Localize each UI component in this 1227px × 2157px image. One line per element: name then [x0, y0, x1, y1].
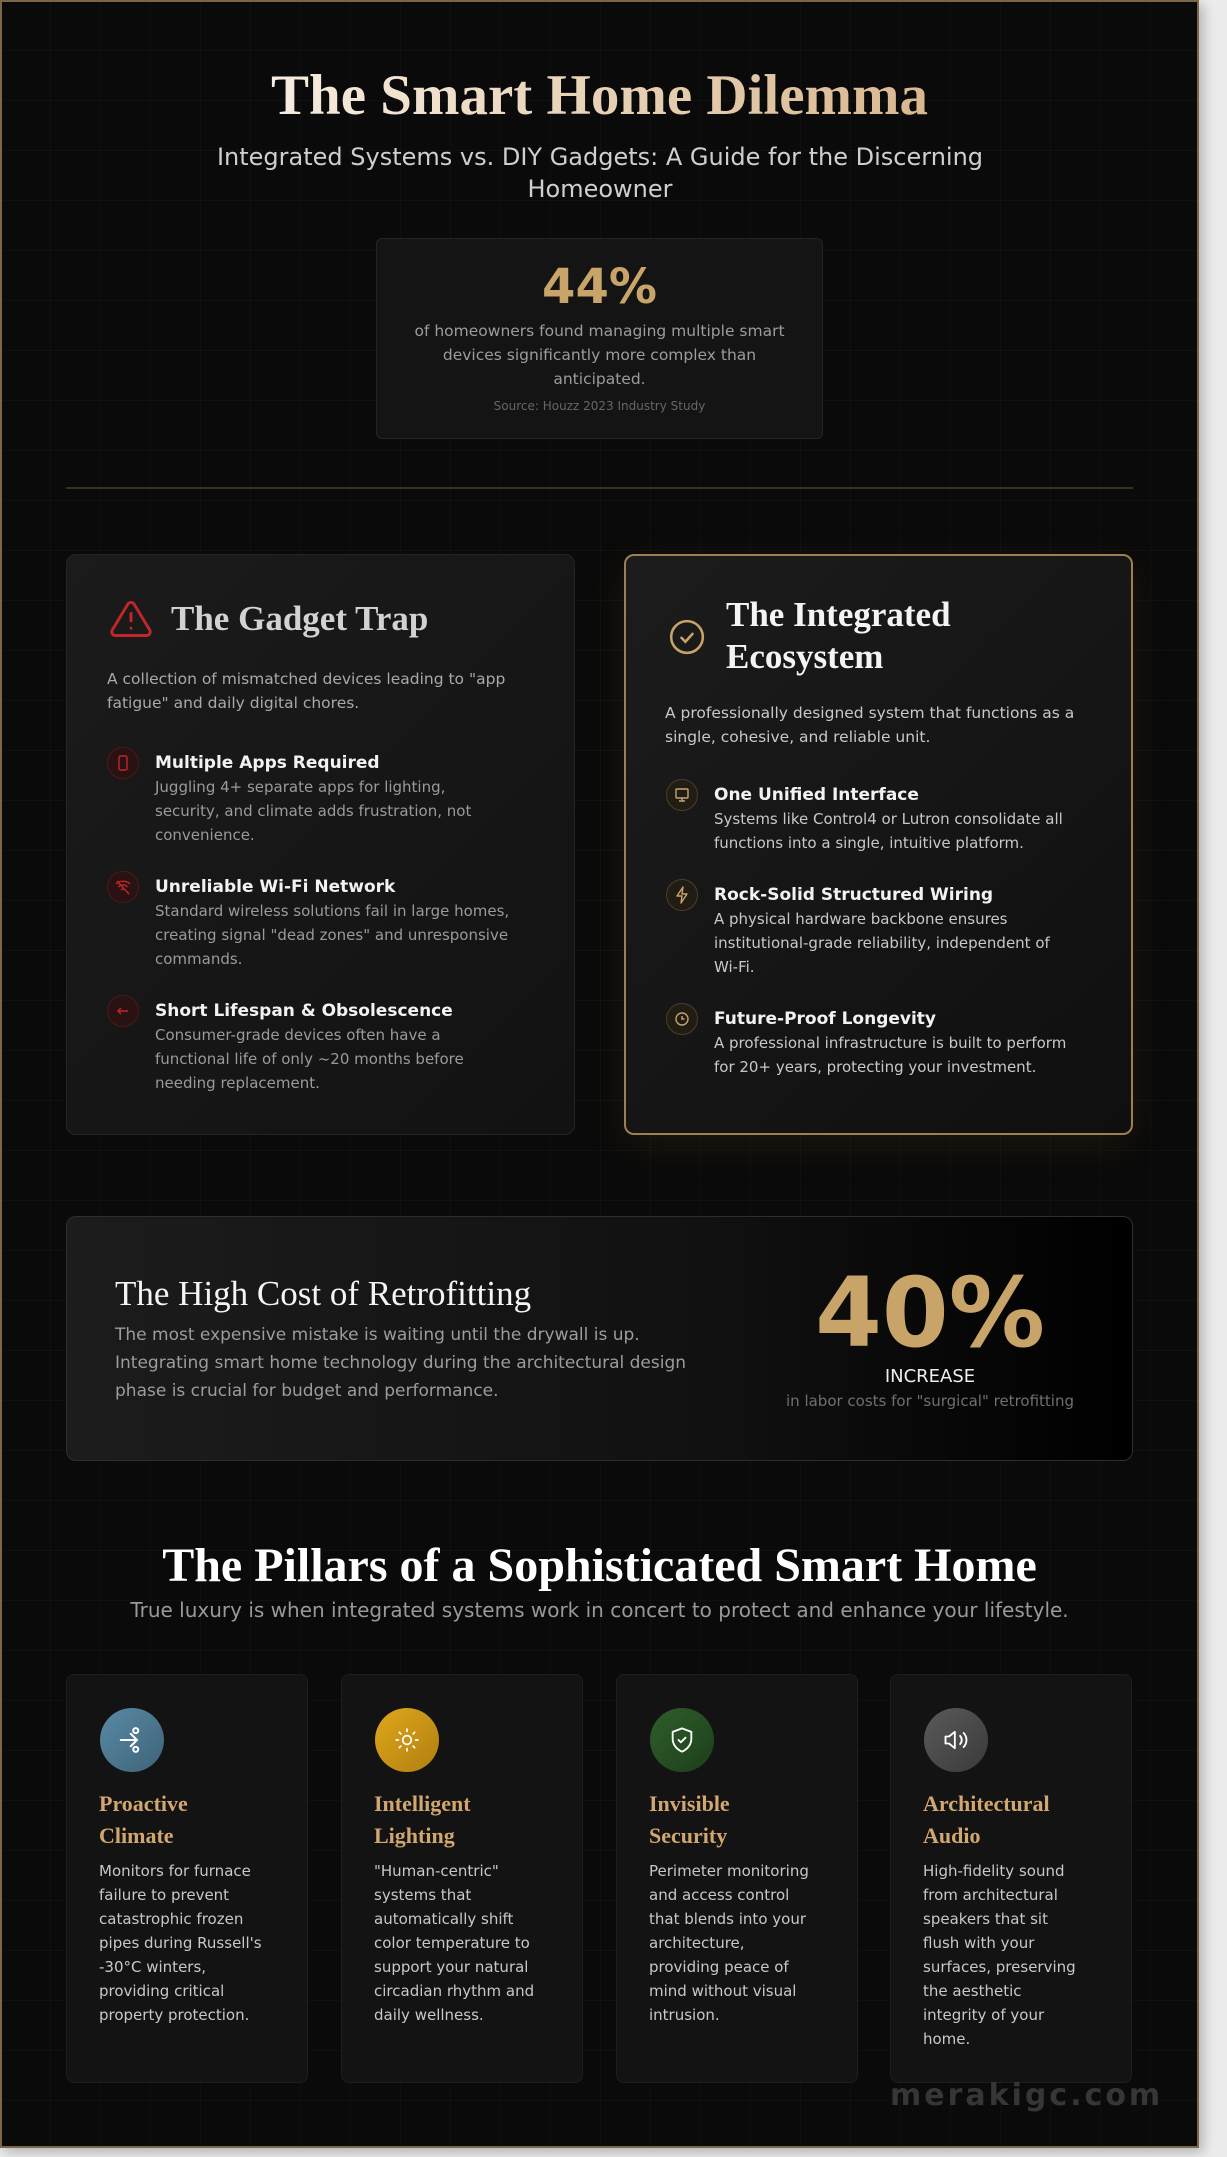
pillar: security: Invisible [649, 1791, 730, 1816]
description: A professionally designed system that functions as a single, cohesive, and reliable unit. [665, 704, 1074, 746]
icon: wind [100, 1708, 164, 1772]
heading: pillars: The Pillars of a Sophisticated Smart Home [162, 1539, 1037, 1592]
pillar: climate [66, 1674, 308, 2083]
icon: shield [650, 1708, 714, 1772]
item: lifespan: Consumer-grade devices often have a functional life of only ~20 months before needing replacement. [155, 1026, 464, 1092]
item: longevity [666, 1003, 1066, 1076]
title: The Smart Home Dilemma [271, 64, 928, 127]
pillar: audio [890, 1674, 1132, 2083]
item: lifespan: Short Lifespan & Obsolescence [155, 1001, 453, 1021]
pillar: security: Security [649, 1823, 727, 1848]
item: wiring [666, 879, 1050, 976]
text: The most expensive mistake is waiting until the drywall is up. Integrating smart home technology during the architectural design phase is crucial for budget and performance. [115, 1325, 686, 1401]
pillar: lighting: Lighting [374, 1823, 455, 1848]
stat: 40%: INCREASE [885, 1366, 975, 1387]
pillar: lighting: Intelligent [374, 1791, 471, 1816]
item: interface: One Unified Interface [714, 785, 919, 805]
source: Source: Houzz 2023 Industry Study [494, 399, 705, 413]
panel: gadget trap [66, 554, 575, 1135]
item: interface: Systems like Control4 or Lutron consolidate all functions into a single, intuitive platform. [714, 810, 1063, 852]
pillar: audio: High-fidelity sound from architectural speakers that sit flush with your surfaces, preserving the aesthetic integrity of your home. [923, 1862, 1076, 2048]
item: multiple apps: Juggling 4+ separate apps for lighting, security, and climate adds frustration, not convenience. [155, 778, 471, 844]
item: longevity: A professional infrastructure is built to perform for 20+ years, protecting your investment. [714, 1034, 1066, 1076]
item: wifi: Standard wireless solutions fail in large homes, creating signal "dead zones" and unresponsive commands. [155, 902, 509, 968]
pillar: audio: Audio [923, 1823, 980, 1848]
item: wifi: Unreliable Wi-Fi Network [155, 877, 395, 897]
watermark: merakigc.com [890, 2078, 1163, 2113]
subtitle: Integrated Systems vs. DIY Gadgets: A Guide for the Discerning Homeowner [217, 143, 983, 203]
pillar: security: Perimeter monitoring and access control that blends into your architecture, providing peace of mind without visual intrusion. [649, 1862, 809, 2024]
pillar: lighting [341, 1674, 583, 2083]
item: interface [666, 779, 1063, 852]
panel: retrofitting cost [66, 1216, 1133, 1461]
item: multiple apps [107, 747, 471, 844]
icon: check circle [670, 620, 704, 654]
pillar: audio: Architectural [923, 1791, 1050, 1816]
subheading: True luxury is when integrated systems work in concert to protect and enhance your lifestyle. [130, 1598, 1069, 1622]
pillar: security [616, 1674, 858, 2083]
item: wiring: A physical hardware backbone ensures institutional-grade reliability, independent of Wi-Fi. [714, 910, 1050, 976]
pillar: climate: Proactive [99, 1791, 188, 1816]
stat text: of homeowners found managing multiple smart devices significantly more complex than anticipated. [414, 322, 785, 388]
item: longevity: Future-Proof Longevity [714, 1009, 936, 1029]
heading: The High Cost of Retrofitting [115, 1274, 531, 1313]
stat: 40%: in labor costs for "surgical" retrofitting [786, 1392, 1074, 1410]
heading: The Gadget Trap [171, 599, 428, 638]
pillar: lighting: "Human-centric" systems that automatically shift color temperature to support your natural circadian rhythm and daily wellness. [374, 1862, 534, 2024]
stat box: 44% [376, 238, 823, 439]
description: A collection of mismatched devices leading to "app fatigue" and daily digital chores. [107, 670, 505, 712]
pillar: climate: Monitors for furnace failure to prevent catastrophic frozen pipes during Russell's -30°C winters, providing critical property protection. [99, 1862, 262, 2024]
icon: speaker [924, 1708, 988, 1772]
stat: 40% [786, 1257, 1074, 1410]
icon: warning [110, 601, 152, 637]
item: wifi [107, 871, 509, 968]
icon: sun [375, 1708, 439, 1772]
item: wiring: Rock-Solid Structured Wiring [714, 885, 993, 905]
item: lifespan [107, 995, 464, 1092]
stat: 40%: 40% [815, 1257, 1045, 1369]
heading: The Integrated Ecosystem [726, 595, 951, 676]
panel: integrated ecosystem [624, 554, 1133, 1135]
item: multiple apps: Multiple Apps Required [155, 753, 380, 773]
pillar: climate: Climate [99, 1823, 174, 1848]
stat number: 44% [542, 259, 657, 315]
